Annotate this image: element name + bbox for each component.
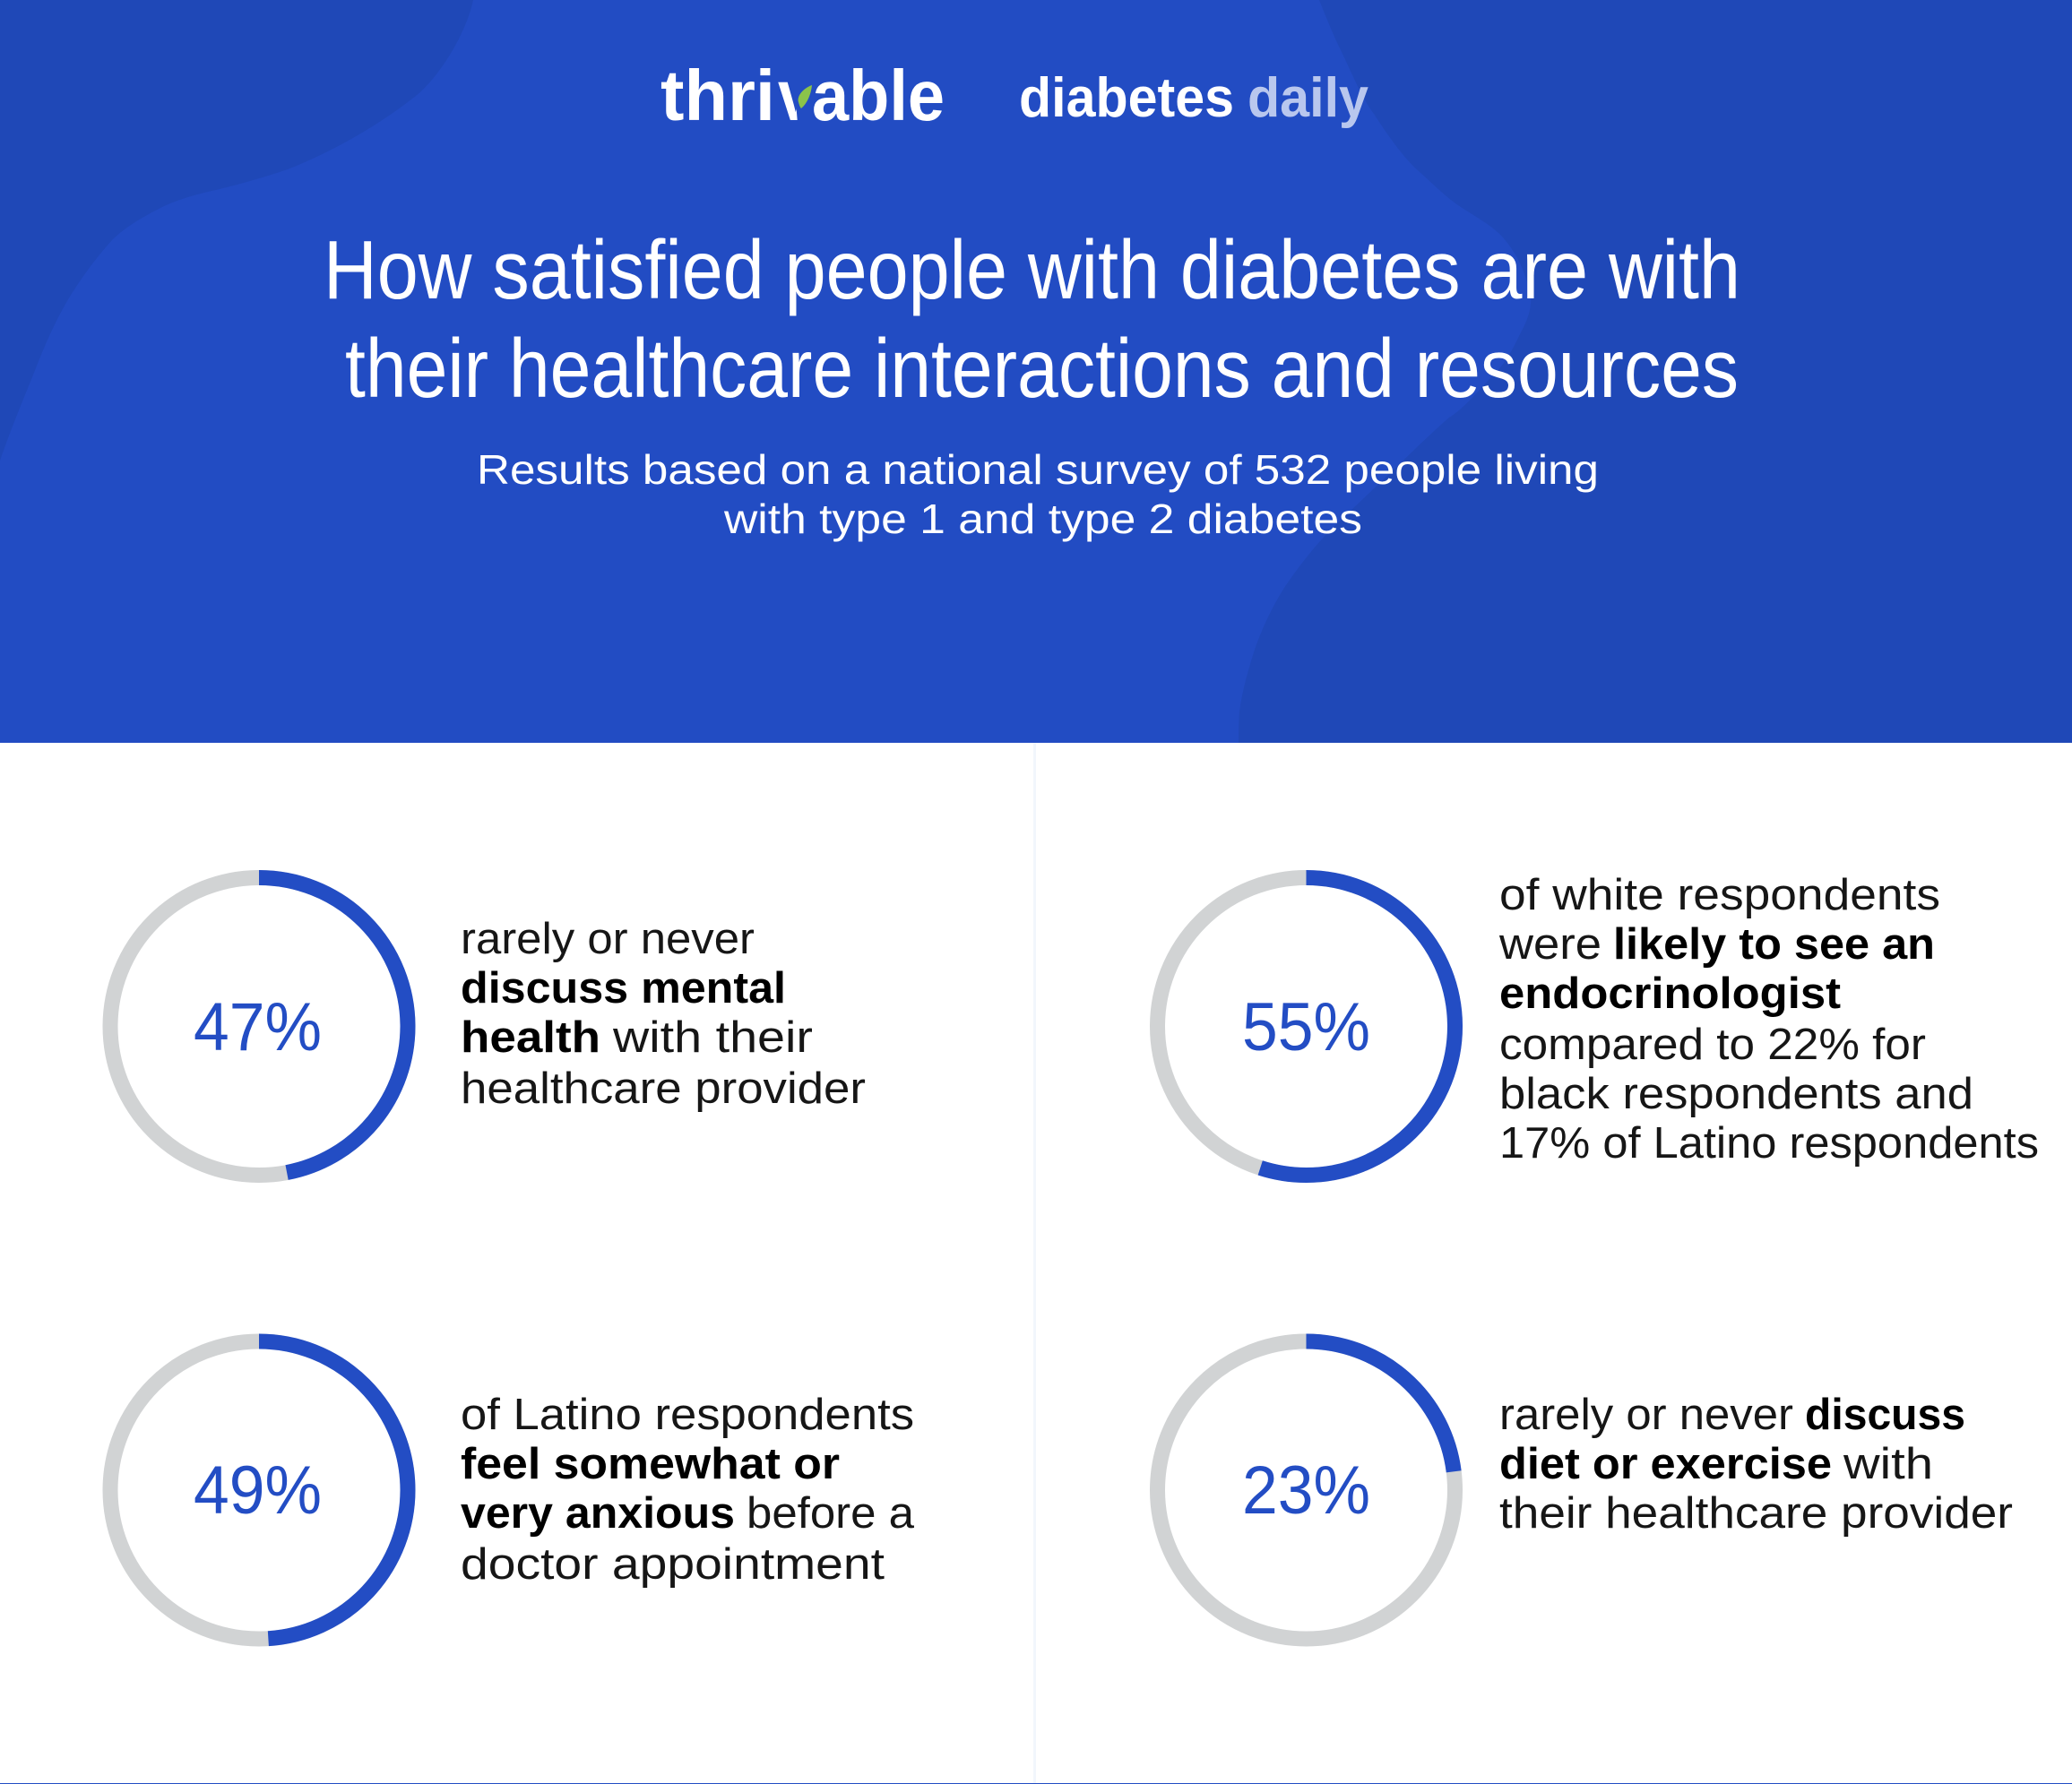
text: 55% description — [1498, 871, 2039, 1168]
panel: blue header — [0, 0, 2072, 743]
text: 47% description: rarely or never — [461, 915, 755, 963]
logo: thrivable: thri — [660, 56, 775, 135]
title — [324, 223, 1740, 415]
text: 47% description: discuss mental — [461, 964, 786, 1013]
text: 49% description — [461, 1391, 915, 1589]
donut: 49%: 49% — [194, 1452, 322, 1529]
text: 55% description: of white respondents — [1499, 871, 1940, 919]
subtitle: with type 1 and type 2 diabetes — [723, 496, 1362, 542]
panel: 49% stat — [110, 1341, 915, 1639]
text: 47% description — [461, 915, 866, 1113]
text: 49% description: of Latino respondents — [461, 1391, 914, 1439]
text: 47% description: health — [461, 1013, 600, 1062]
logo: thrivable: able — [812, 56, 945, 135]
logo: thrivable — [660, 56, 945, 135]
text: 55% description: were — [1498, 920, 1601, 969]
text: 55% description: likely to see an — [1613, 920, 1935, 969]
text: 23% description: discuss — [1805, 1391, 1965, 1439]
text: 49% description: feel somewhat or — [461, 1440, 840, 1488]
text: 23% description: rarely or never — [1499, 1391, 1793, 1439]
logo: thrivable: v — [778, 56, 814, 135]
donut: 23%: 23% — [1242, 1452, 1370, 1529]
title: their healthcare interactions and resources — [345, 322, 1739, 415]
text: 47% description: with their — [612, 1013, 813, 1062]
panel: 23% stat — [1158, 1341, 2013, 1639]
logo: diabetes daily: diabetes — [1019, 67, 1234, 129]
text: 47% description: healthcare provider — [461, 1064, 866, 1113]
text: 23% description: with — [1843, 1440, 1933, 1488]
donut: 23% — [1158, 1341, 1455, 1639]
subtitle — [477, 446, 1599, 542]
donut: 55%: 55% — [1242, 989, 1370, 1065]
donut: 49% — [110, 1341, 408, 1639]
text: 23% description: their healthcare provider — [1499, 1489, 2013, 1538]
text: 23% description: diet or exercise — [1499, 1440, 1832, 1488]
panel: 47% stat — [110, 878, 866, 1176]
text: 55% description: endocrinologist — [1499, 970, 1841, 1018]
donut: 47% — [110, 878, 408, 1176]
text: 49% description: doctor appointment — [461, 1540, 885, 1589]
logo: diabetes daily — [1019, 67, 1368, 129]
donut: 47%: 47% — [194, 989, 322, 1065]
logo: diabetes daily: daily — [1248, 67, 1368, 129]
title: How satisfied people with diabetes are with — [324, 223, 1740, 316]
text: 49% description: before a — [747, 1489, 915, 1538]
subtitle: Results based on a national survey of 532 people living — [477, 446, 1599, 493]
panel: 55% stat — [1158, 871, 2039, 1176]
text: 55% description: black respondents and — [1499, 1070, 1973, 1118]
text: 49% description: very anxious — [461, 1489, 735, 1538]
donut: 55% — [1158, 878, 1455, 1176]
text: 55% description: compared to 22% for — [1499, 1021, 1926, 1069]
text: 55% description: 17% of Latino respondents — [1499, 1119, 2039, 1168]
text: 23% description — [1499, 1391, 2013, 1538]
